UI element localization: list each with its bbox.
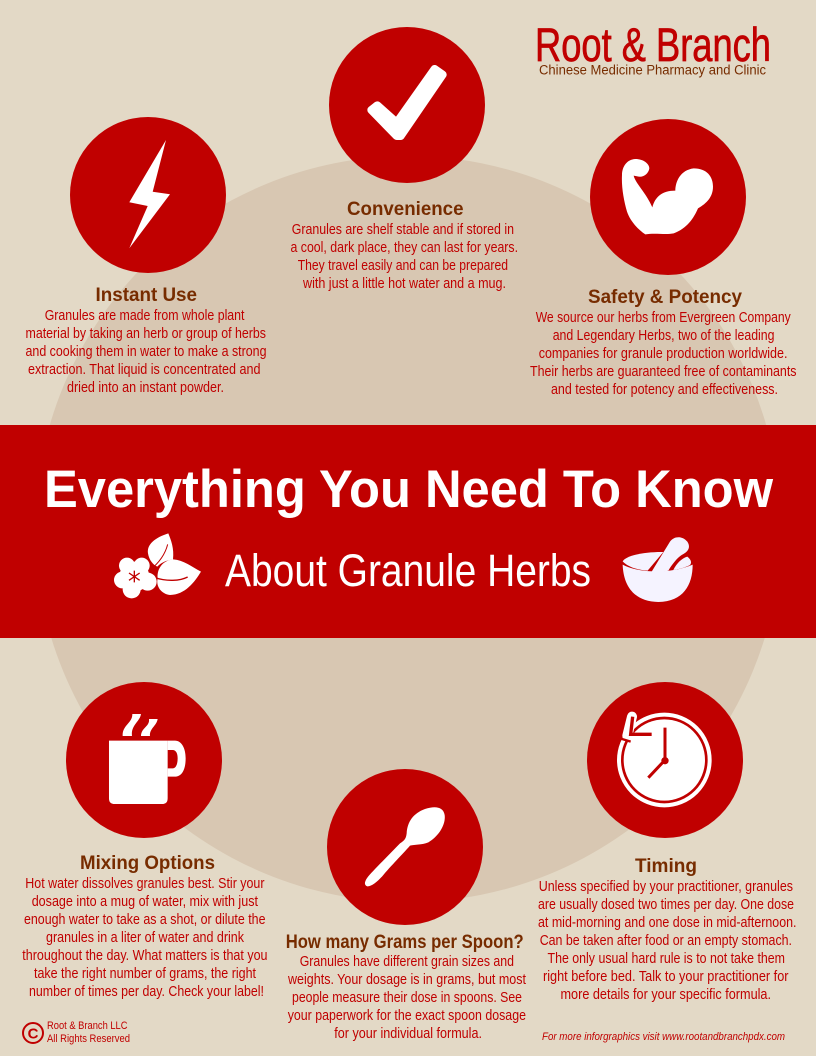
text block: How many Grams per Spoon?: your paperwork for the exact spoon dosage — [288, 1008, 526, 1024]
text block: Mixing Options: throughout the day. What matters is that you — [22, 948, 267, 964]
panel: How many Grams per Spoon? — [286, 769, 526, 1042]
heading: Convenience: Convenience — [347, 199, 464, 220]
icon: spoon — [327, 769, 483, 925]
text block: Mixing Options: take the right number of grams, the right — [34, 966, 256, 982]
panel: Timing — [538, 682, 796, 1003]
panel: Mixing Options — [22, 682, 267, 1000]
heading: How many Grams per Spoon?: How many Grams per Spoon? — [286, 932, 524, 953]
text block: Safety & Potency: and tested for potency and effectiveness. — [551, 382, 778, 398]
heading: Safety & Potency: Safety & Potency — [588, 287, 742, 308]
icon: flower and leaves — [114, 533, 201, 598]
footer: copyright — [23, 1020, 130, 1045]
icon: flexed arm — [590, 119, 746, 275]
title: Everything You Need To Know — [44, 460, 774, 519]
text block: Safety & Potency — [530, 310, 796, 398]
text block: How many Grams per Spoon?: weights. Your dosage is in grams, but most — [287, 972, 526, 988]
footer: copyright: C — [28, 1026, 39, 1042]
text block: Convenience: They travel easily and can be prepared — [298, 258, 508, 274]
heading: Instant Use: Instant Use — [96, 285, 197, 306]
background circle — [35, 156, 781, 902]
footer: website note: For more inforgraphics visit www.rootandbranchpdx.com — [542, 1031, 785, 1043]
footer: copyright: All Rights Reserved — [47, 1033, 130, 1045]
text block: Mixing Options — [22, 876, 267, 1000]
panel: Safety & Potency — [530, 119, 796, 398]
heading: Mixing Options: Mixing Options — [80, 853, 215, 874]
panel: Instant Use — [26, 117, 266, 396]
text block: Mixing Options: granules in a liter of water and drink — [46, 930, 245, 946]
text block: Timing: more details for your specific formula. — [560, 987, 771, 1003]
text block: Mixing Options: number of times per day. Check your label! — [29, 984, 264, 1000]
panel: Convenience — [290, 27, 518, 292]
heading: Timing: Timing — [635, 856, 697, 877]
text block: Convenience: a cool, dark place, they can last for years. — [290, 240, 518, 256]
icon: steaming mug — [66, 682, 222, 838]
text block: Mixing Options: enough water to take as a shot, or dilute the — [24, 912, 266, 928]
text block: Convenience: Granules are shelf stable and if stored in — [292, 222, 514, 238]
text block: How many Grams per Spoon? — [287, 954, 526, 1042]
text block: Convenience: with just a little hot water and a mug. — [302, 276, 506, 292]
subtitle: About Granule Herbs — [225, 545, 591, 596]
logo: Root & Branch: Chinese Medicine Pharmacy and Clinic — [539, 62, 766, 78]
icon: lightning bolt — [70, 117, 226, 273]
text block: Instant Use: and cooking them in water to make a strong — [26, 344, 266, 360]
text block: How many Grams per Spoon?: Granules have different grain sizes and — [300, 954, 514, 970]
text block: Convenience — [290, 222, 518, 292]
text block: Instant Use: extraction. That liquid is concentrated and — [28, 362, 260, 378]
text block: Timing: right before bed. Talk to your practitioner for — [543, 969, 789, 985]
text block: Instant Use: Granules are made from whole plant — [45, 308, 245, 324]
text block: Instant Use: dried into an instant powder. — [67, 380, 224, 396]
icon: mortar and pestle — [623, 537, 693, 602]
text block: Timing — [538, 879, 796, 1003]
icon: clock with arrow — [587, 682, 743, 838]
text block: Mixing Options: dosage into a mug of water, mix with just — [32, 894, 258, 910]
text block: Instant Use: material by taking an herb or group of herbs — [26, 326, 266, 342]
text block: Instant Use — [26, 308, 266, 396]
icon: check mark — [329, 27, 485, 183]
text block: How many Grams per Spoon?: for your individual formula. — [334, 1026, 482, 1042]
text block: Safety & Potency: and Legendary Herbs, two of the leading — [553, 328, 774, 344]
text block: How many Grams per Spoon?: people measure their dose in spoons. See — [292, 990, 522, 1006]
title banner — [0, 425, 816, 638]
footer: copyright: Root & Branch LLC — [47, 1020, 128, 1032]
text block: Mixing Options: Hot water dissolves granules best. Stir your — [25, 876, 265, 892]
